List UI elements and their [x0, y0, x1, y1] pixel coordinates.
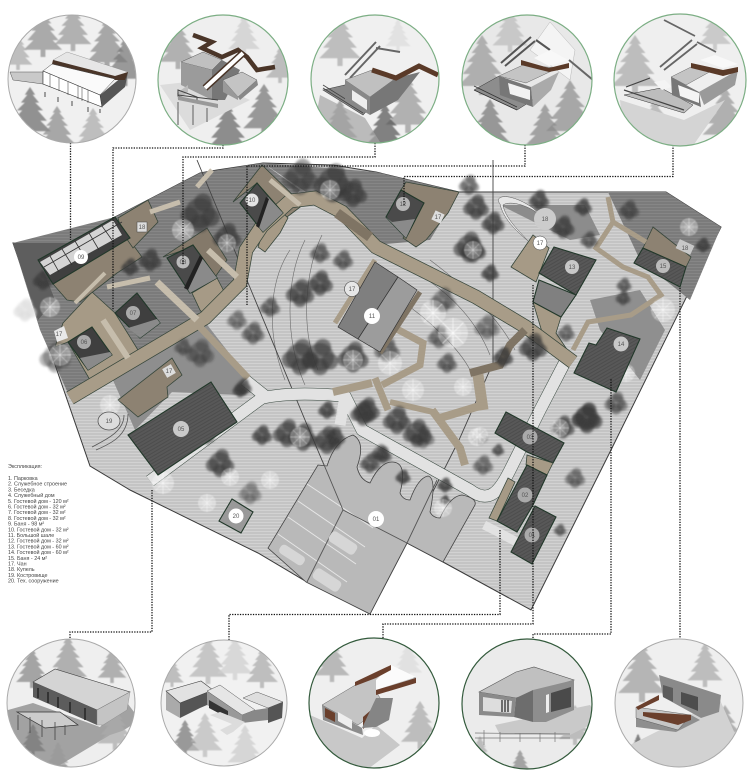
- white canopy trees: [40, 180, 698, 517]
- building 15: [634, 248, 686, 287]
- contour lines: [197, 160, 515, 543]
- building 02: [489, 455, 553, 532]
- number labels: 01: [373, 517, 380, 523]
- building 14: [574, 328, 640, 392]
- legend: 11. Большой шале: [8, 532, 54, 539]
- building 10: [240, 183, 283, 232]
- number labels: 17: [349, 287, 356, 293]
- number labels: 06: [81, 340, 88, 346]
- number labels: 15: [660, 264, 667, 270]
- roads: [150, 362, 565, 545]
- legend: Экспликация:: [8, 464, 42, 470]
- technical building 20: [219, 499, 253, 533]
- vignette: bottom 3: [308, 637, 440, 769]
- number labels: 10: [249, 198, 256, 204]
- legend: 3. Беседка: [8, 487, 35, 493]
- main wooden walkway: [70, 198, 573, 398]
- decks: [53, 165, 691, 417]
- vignette: bottom 2: [160, 640, 288, 766]
- building 08: [167, 245, 217, 293]
- building 03: [495, 412, 564, 463]
- legend: 2. Служебное строение: [8, 482, 67, 488]
- vignette: top 5: [610, 10, 750, 151]
- dotted leader lines: [70, 143, 680, 640]
- number labels: 17: [537, 241, 544, 247]
- vignette: bottom 4: [461, 638, 593, 770]
- legend: 14. Гостевой дом - 60 м²: [8, 549, 69, 556]
- legend: 19. Костровище: [8, 573, 48, 579]
- parking: [268, 435, 475, 614]
- legend: 4. Служебный дом: [8, 492, 55, 499]
- vignette: bottom 5: [614, 638, 744, 768]
- building 05: [128, 382, 237, 475]
- trees: [13, 159, 711, 537]
- building 07: [115, 293, 160, 338]
- legend: 15. Баня - 24 м²: [8, 556, 47, 562]
- bath 18 pad: [498, 197, 545, 241]
- number labels: 18: [542, 217, 549, 223]
- number labels: 08: [180, 260, 187, 266]
- building 09: [38, 217, 130, 284]
- number labels: 13: [569, 265, 576, 271]
- number labels: 19: [106, 419, 113, 425]
- number labels: 18: [139, 225, 146, 231]
- legend: 9. Баня - 98 м²: [8, 522, 44, 528]
- vignette: top 1: [8, 14, 136, 144]
- legend: 5. Гостевой дом - 120 м²: [8, 498, 69, 505]
- number labels: 18: [682, 246, 689, 252]
- number labels: 17: [166, 369, 173, 375]
- legend: [8, 464, 69, 585]
- number labels: 02: [522, 493, 529, 499]
- legend: 8. Гостевой дом - 32 м²: [8, 515, 66, 522]
- vignette: top 3: [310, 14, 440, 144]
- number labels: 07: [130, 311, 137, 317]
- legend: 13. Гостевой дом - 60 м²: [8, 543, 69, 550]
- legend: 10. Гостевой дом - 32 м²: [8, 526, 69, 533]
- number labels: 11: [369, 314, 376, 320]
- number labels: 05: [178, 427, 185, 433]
- central lodge: [335, 260, 420, 353]
- number labels: 20: [233, 514, 240, 520]
- boardwalks: [75, 170, 661, 465]
- number labels: 01: [529, 533, 536, 539]
- number labels: 03: [527, 435, 534, 441]
- legend: 7. Гостевой дом - 32 м²: [8, 509, 66, 516]
- number labels: 12: [400, 202, 407, 208]
- campfire 19: [92, 412, 128, 450]
- vignette: top 4: [461, 14, 593, 146]
- vignette: top 2: [157, 14, 289, 146]
- number labels: 14: [618, 342, 625, 348]
- building 01: [511, 506, 556, 564]
- building 13: [533, 247, 596, 317]
- legend: 18. Купель: [8, 567, 35, 573]
- legend: 1. Парковка: [8, 476, 38, 482]
- number labels: 17: [56, 332, 63, 338]
- number labels: 17: [435, 215, 442, 221]
- building 06: [68, 327, 112, 370]
- legend: 12. Гостевой дом - 32 м²: [8, 538, 69, 545]
- legend: 17. Чан: [8, 562, 27, 568]
- number labels: 09: [78, 255, 85, 261]
- number labels: [54, 194, 694, 542]
- site ground: [13, 163, 721, 614]
- legend: 6. Гостевой дом - 32 м²: [8, 504, 66, 510]
- building 12: [386, 190, 424, 238]
- legend: 20. Тех. сооружение: [8, 579, 59, 585]
- vignette: bottom 1: [6, 638, 136, 768]
- site plan: [13, 159, 721, 614]
